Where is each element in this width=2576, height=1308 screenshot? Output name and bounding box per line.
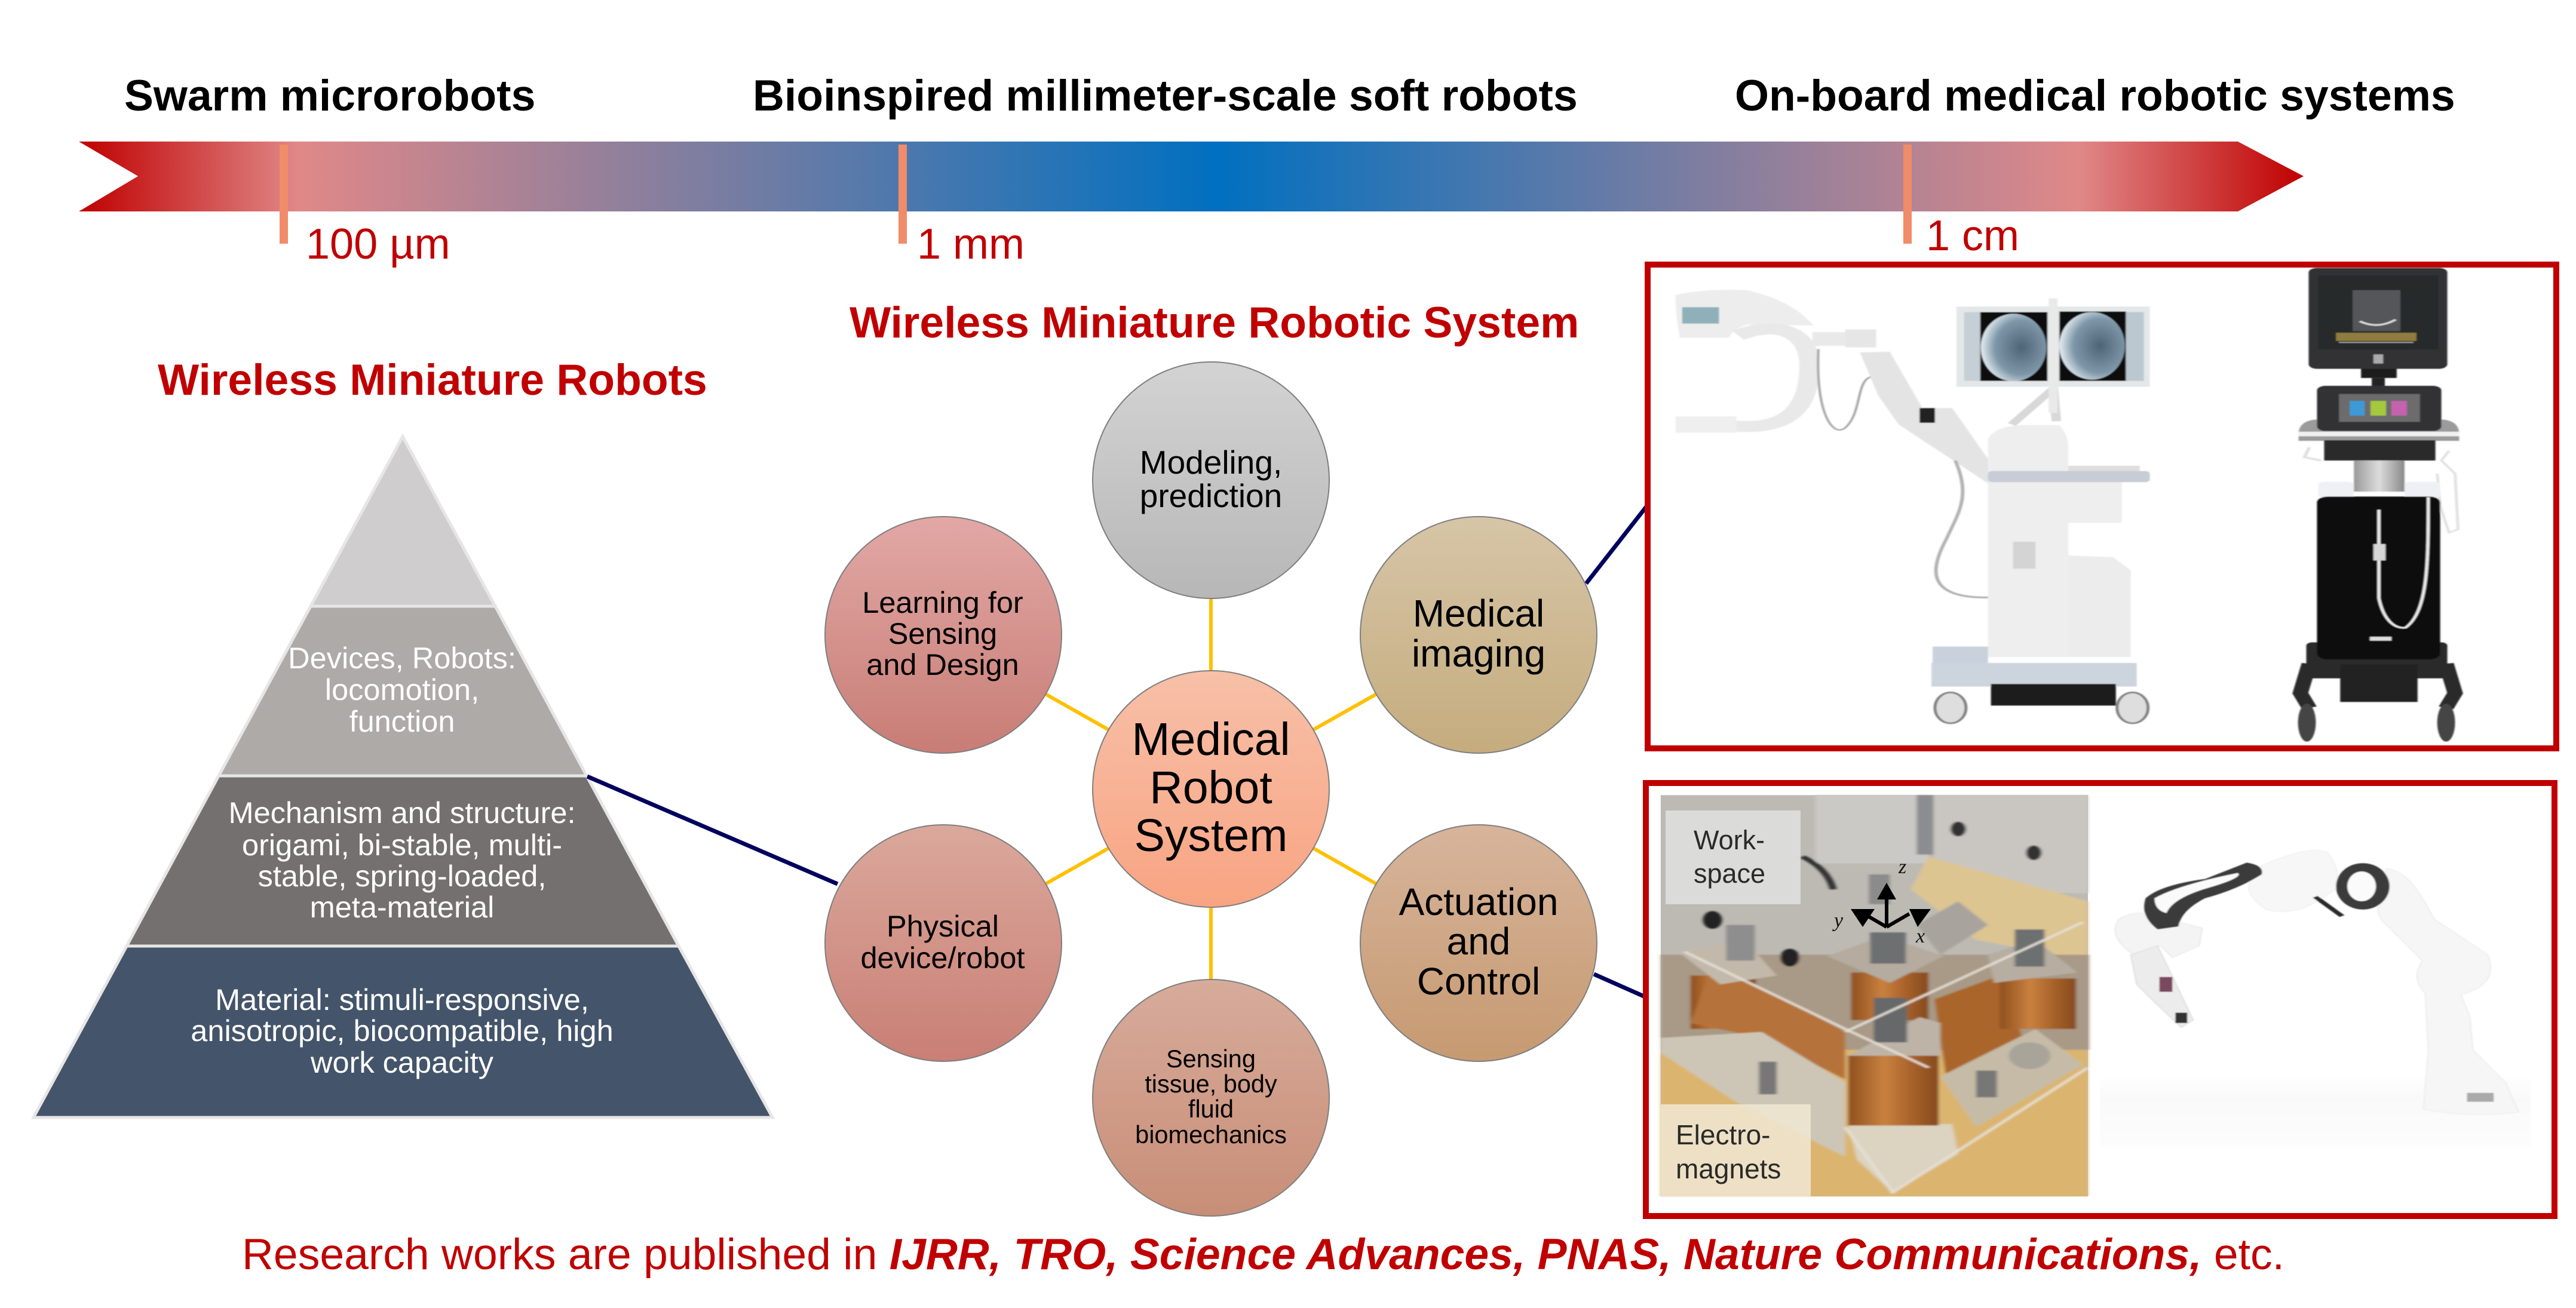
timeline heading: bioinspired soft robots: Bioinspired millimeter-scale soft robots: [753, 71, 1578, 120]
pyramid text: Material: stimuli-responsive,: [215, 982, 589, 1017]
connector: medical imaging to imaging panel: [1586, 506, 1646, 584]
pyramid text: anisotropic, biocompatible, high: [191, 1014, 614, 1048]
pyramid tier: mechanism and structure: [127, 776, 679, 946]
node: modeling, prediction: Modeling,: [1140, 444, 1282, 481]
icon: xyz axes: [1832, 856, 1931, 947]
icon: xyz axes: x: [1915, 925, 1925, 947]
timeline heading: swarm microrobots: Swarm microrobots: [124, 71, 535, 120]
tick: 100 um: [280, 145, 450, 268]
pyramid tier: material: [33, 946, 772, 1117]
panel: actuation equipment: [1646, 783, 2554, 1216]
node: actuation and control: [1360, 825, 1597, 1061]
node: sensing tissue, body fluid biomechanics: biomechanics: [1135, 1120, 1287, 1149]
pyramid: [33, 437, 772, 1117]
footer note: Research works are published in IJRR, TRO, Science Advances, PNAS, Nature Communications, etc.: [242, 1230, 2284, 1279]
node: medical robot system (centre): System: [1134, 810, 1287, 861]
connector: pyramid to physical device: [587, 776, 838, 884]
node: sensing tissue, body fluid biomechanics: [1093, 980, 1329, 1216]
label: work-space: Work-: [1694, 825, 1765, 855]
pyramid text: [191, 641, 614, 1079]
node: modeling, prediction: prediction: [1140, 477, 1282, 514]
pyramid tier: top: [311, 437, 495, 606]
pyramid text: function: [349, 704, 455, 738]
node: medical imaging: imaging: [1412, 632, 1545, 675]
pyramid tier: devices, robots: [219, 606, 587, 776]
node: modeling, prediction: [1093, 362, 1329, 598]
pyramid text: Mechanism and structure:: [228, 796, 576, 830]
node: learning for sensing and design: Sensing: [888, 616, 997, 650]
icon: ultrasound imaging station: [2298, 268, 2460, 742]
node: learning for sensing and design: Learning for: [862, 585, 1023, 619]
label: work-space: [1666, 810, 1801, 904]
pyramid text: locomotion,: [325, 673, 479, 707]
tick: 100 um: 100 µm: [306, 220, 450, 268]
icon: C-arm x-ray machine: [1676, 290, 2150, 723]
panel: medical imaging equipment: [1648, 265, 2556, 748]
heading: wireless miniature robots: Wireless Miniature Robots: [158, 355, 707, 404]
node: actuation and control: Actuation: [1399, 880, 1558, 923]
node: actuation and control: and: [1447, 920, 1510, 963]
node: medical imaging: [1360, 517, 1597, 753]
heading: wireless miniature robotic system: Wireless Miniature Robotic System: [850, 298, 1579, 347]
tick: 1 mm: [898, 145, 1025, 268]
node: actuation and control: Control: [1417, 960, 1540, 1003]
node: medical robot system (centre): [1093, 671, 1329, 907]
timeline heading: on-board systems: On-board medical robotic systems: [1735, 71, 2455, 120]
icon: xyz axes: z: [1898, 856, 1906, 878]
node: physical device/robot: [825, 825, 1062, 1061]
node: physical device/robot: Physical: [887, 909, 999, 943]
tick: 1 mm: 1 mm: [917, 220, 1025, 268]
node: medical robot system (centre): Medical: [1131, 714, 1290, 765]
node: learning for sensing and design: [825, 517, 1062, 753]
node: sensing tissue, body fluid biomechanics: tissue, body: [1145, 1070, 1277, 1098]
pyramid text: meta-material: [310, 890, 494, 924]
pyramid text: Devices, Robots:: [288, 641, 516, 675]
node: medical robot system (centre): Robot: [1149, 762, 1272, 813]
node: learning for sensing and design: and Design: [866, 647, 1019, 681]
label: electro-magnets: magnets: [1676, 1153, 1781, 1184]
node: sensing tissue, body fluid biomechanics: Sensing: [1166, 1045, 1256, 1073]
node: physical device/robot: device/robot: [860, 941, 1025, 975]
node: medical imaging: Medical: [1413, 592, 1544, 635]
node: sensing tissue, body fluid biomechanics: fluid: [1188, 1095, 1234, 1123]
pyramid text: origami, bi-stable, multi-: [242, 828, 562, 862]
tick: 1 cm: 1 cm: [1926, 212, 2019, 260]
tick: 1 cm: [1903, 145, 2019, 260]
pyramid text: work capacity: [310, 1045, 494, 1079]
icon: robotic arm: [2100, 850, 2531, 1148]
label: electro-magnets: Electro-: [1676, 1119, 1770, 1150]
label: electro-magnets: [1661, 1104, 1811, 1196]
gradient size-scale arrow: [79, 142, 2304, 211]
gold spokes of the network: [1045, 599, 1376, 979]
electromagnetic coil system photo: [1661, 795, 2089, 1196]
icon: xyz axes: y: [1832, 910, 1844, 932]
connector: actuation to actuation panel: [1594, 974, 1646, 997]
pyramid text: stable, spring-loaded,: [258, 859, 546, 893]
label: work-space: space: [1694, 858, 1765, 889]
